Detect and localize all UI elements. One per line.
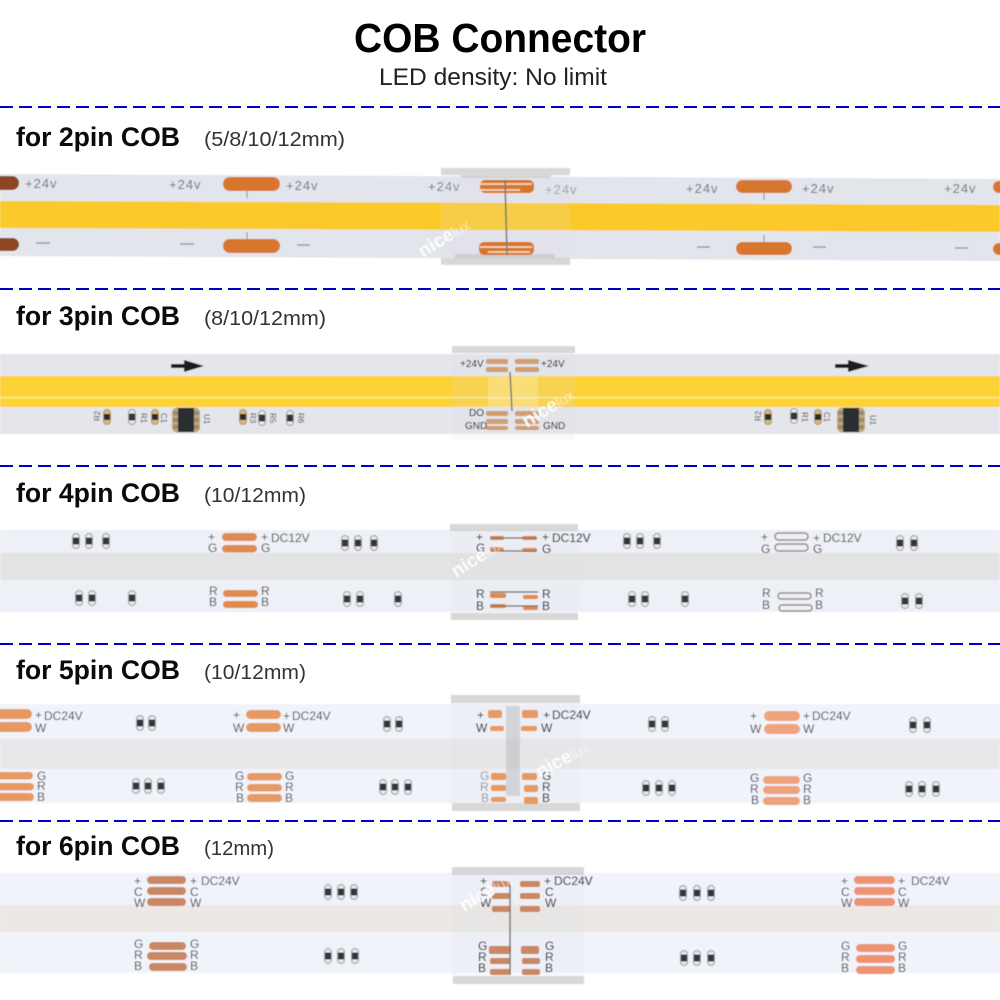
- strip: 4pin: G: [261, 541, 270, 555]
- strip: 2pin: +24v: [286, 178, 319, 193]
- size note: 3pin: (8/10/12mm): [204, 308, 326, 330]
- strip: 4pin: [0, 530, 1000, 612]
- strip: 2pin: +24v: [686, 181, 719, 196]
- connector: 4pin: nicelux: [448, 534, 508, 582]
- connector: 4pin: [448, 524, 591, 620]
- strip: 5pin: B: [751, 793, 759, 807]
- connector: 5pin: R: [480, 780, 489, 794]
- connector: 6pin: nicelux: [456, 869, 516, 916]
- size note: 6pin: (12mm): [204, 838, 274, 860]
- connector: 4pin: +: [476, 530, 483, 544]
- panel: 3pin COB: [0, 301, 1000, 440]
- strip: 3pin: C1: [159, 413, 168, 424]
- connector: 6pin: +: [544, 874, 551, 888]
- heading: 4pin: for 4pin COB: [16, 478, 180, 508]
- panel: 5pin COB: [0, 655, 1000, 811]
- strip: 5pin: +: [35, 708, 42, 722]
- connector: 3pin: +24V: [541, 359, 565, 370]
- strip: 5pin: W: [750, 722, 762, 736]
- connector: 6pin: B: [545, 961, 553, 975]
- strip: 4pin: G: [813, 542, 822, 556]
- connector: 4pin: R: [542, 587, 551, 601]
- strip: 5pin: DC24V: [44, 709, 83, 723]
- strip: 5pin: W: [233, 721, 245, 735]
- connector: 6pin: G: [478, 939, 487, 953]
- size note: 2pin: (5/8/10/12mm): [204, 129, 345, 151]
- strip: 5pin: G: [235, 769, 244, 783]
- connector: 3pin: +24V: [460, 359, 484, 370]
- strip: 5pin: DC24V: [812, 709, 851, 723]
- strip: 4pin: R: [762, 586, 771, 600]
- strip: 3pin: R3: [248, 413, 257, 424]
- panel: 2pin COB: [0, 122, 1000, 267]
- strip: 4pin: DC12V: [271, 531, 310, 545]
- strip: 6pin: C: [898, 885, 907, 899]
- connector: 5pin: G: [480, 769, 489, 783]
- strip: 5pin: +: [750, 709, 757, 723]
- connector: 3pin: nicelux: [519, 384, 579, 432]
- strip: 4pin: B: [209, 595, 217, 609]
- strip: 5pin: R: [285, 780, 294, 794]
- strip: 6pin: R: [898, 950, 907, 964]
- connector: 5pin: nicelux: [532, 737, 593, 782]
- strip: 6pin: W: [898, 896, 910, 910]
- strip: 4pin: R: [815, 586, 824, 600]
- strip: 6pin: +: [841, 874, 848, 888]
- connector: 5pin: W: [476, 721, 488, 735]
- strip: 5pin: B: [37, 790, 45, 804]
- strip: 4pin: R: [261, 584, 270, 598]
- size note: 5pin: (10/12mm): [204, 662, 306, 684]
- title: COB Connector: [354, 15, 646, 61]
- connector: 6pin: DC24V: [554, 874, 593, 888]
- strip: 4pin: R: [209, 584, 218, 598]
- strip: 4pin: +: [761, 530, 768, 544]
- strip: 6pin: G: [190, 937, 199, 951]
- connector: 5pin: +: [477, 708, 484, 722]
- panel: 6pin COB: [0, 831, 1000, 984]
- connector: 5pin: DC24V: [552, 708, 591, 722]
- strip: 3pin: R5: [268, 413, 277, 424]
- strip: 6pin: B: [134, 959, 142, 973]
- strip: 3pin: R1: [800, 412, 809, 423]
- strip: 3pin: R2: [754, 410, 763, 421]
- strip: 5pin: W: [35, 721, 47, 735]
- strip: 6pin: B: [841, 961, 849, 975]
- strip: 5pin: G: [37, 769, 46, 783]
- connector: 5pin: R: [542, 780, 551, 794]
- strip: 6pin: G: [898, 939, 907, 953]
- strip: 5pin: +: [233, 708, 240, 722]
- heading: 2pin: for 2pin COB: [16, 122, 180, 152]
- connector: 6pin: G: [545, 939, 554, 953]
- strip: 3pin: C1: [822, 412, 831, 423]
- connector: 5pin: B: [481, 791, 489, 805]
- strip: 5pin: [0, 704, 1000, 807]
- strip: 6pin: B: [190, 959, 198, 973]
- connector: 5pin: G: [542, 769, 551, 783]
- strip: 5pin: G: [750, 771, 759, 785]
- strip: 5pin: +: [283, 709, 290, 723]
- strip: 5pin: R: [750, 782, 759, 796]
- strip: 6pin: G: [841, 939, 850, 953]
- strip: 2pin: +24v: [944, 181, 977, 196]
- strip: 4pin: +: [261, 530, 268, 544]
- connector: 4pin: +: [542, 530, 549, 544]
- connector: 6pin: B: [478, 961, 486, 975]
- strip: 5pin: R: [37, 779, 46, 793]
- strip: 2pin: +24v: [25, 176, 58, 191]
- connector: 3pin: GND: [543, 421, 565, 432]
- strip: 3pin: U1: [202, 414, 211, 425]
- strip: 2pin: [0, 174, 1000, 267]
- strip: 5pin: W: [283, 721, 295, 735]
- strip: 6pin: +: [898, 874, 905, 888]
- connector: 4pin: DC12V: [552, 531, 591, 545]
- connector: 5pin: +: [543, 708, 550, 722]
- strip: 5pin: W: [803, 722, 815, 736]
- strip: 6pin: C: [190, 885, 199, 899]
- connector: 4pin: G: [542, 542, 551, 556]
- connector: 6pin: +: [480, 874, 487, 888]
- strip: 4pin: B: [261, 595, 269, 609]
- connector: 4pin: B: [476, 599, 484, 613]
- strip: 2pin: +24v: [169, 177, 202, 192]
- strip: 5pin: DC24V: [292, 709, 331, 723]
- strip: 4pin: B: [762, 598, 770, 612]
- strip: 4pin: G: [208, 541, 217, 555]
- strip: 6pin: W: [190, 896, 202, 910]
- connector: 3pin: [452, 346, 579, 440]
- strip: 6pin: DC24V: [911, 874, 950, 888]
- strip: 6pin: DC24V: [201, 874, 240, 888]
- strip: 6pin: W: [134, 896, 146, 910]
- strip: 4pin: DC12V: [823, 531, 862, 545]
- connector: 3pin: DO: [469, 408, 484, 419]
- connector: 2pin: [415, 168, 570, 265]
- connector: 6pin: W: [545, 896, 557, 910]
- strip: 6pin: +: [190, 874, 197, 888]
- heading: 5pin: for 5pin COB: [16, 655, 180, 685]
- panel: 4pin COB: [0, 478, 1000, 620]
- strip: 2pin: +24v: [802, 181, 835, 196]
- connector: 4pin: R: [476, 587, 485, 601]
- strip: 4pin: +: [208, 530, 215, 544]
- connector: 3pin: GND: [465, 421, 487, 432]
- strip: 6pin: R: [134, 948, 143, 962]
- strip: 6pin: B: [898, 961, 906, 975]
- strip: 5pin: G: [285, 769, 294, 783]
- heading: 3pin: for 3pin COB: [16, 301, 180, 331]
- strip: 5pin: R: [803, 782, 812, 796]
- connector: 6pin: C: [545, 885, 554, 899]
- connector: 4pin: G: [476, 541, 485, 555]
- strip: 5pin: R: [235, 780, 244, 794]
- connector: 6pin: R: [545, 950, 554, 964]
- strip: 3pin: U1: [868, 415, 877, 426]
- strip: 6pin: +: [134, 874, 141, 888]
- strip: 3pin: R1: [139, 413, 148, 424]
- connector: 6pin: C: [480, 885, 489, 899]
- strip: 3pin: R6: [296, 413, 305, 424]
- strip: 5pin: B: [285, 791, 293, 805]
- strip: 5pin: B: [803, 793, 811, 807]
- connector: 2pin: nicelux: [415, 214, 475, 262]
- arrow: direction left: [171, 360, 204, 372]
- strip: 6pin: C: [134, 885, 143, 899]
- strip: 5pin: +: [803, 709, 810, 723]
- arrow: direction right: [835, 360, 869, 372]
- connector: 5pin: W: [541, 721, 553, 735]
- strip: 5pin: B: [236, 791, 244, 805]
- connector: 6pin: R: [478, 950, 487, 964]
- strip: 4pin: +: [813, 531, 820, 545]
- size note: 4pin: (10/12mm): [204, 485, 306, 507]
- connector: 4pin: B: [542, 599, 550, 613]
- strip: 2pin: +24v: [428, 179, 461, 194]
- heading: 6pin: for 6pin COB: [16, 831, 180, 861]
- strip: 6pin: R: [190, 948, 199, 962]
- strip: 6pin: G: [134, 937, 143, 951]
- strip: 6pin: W: [841, 896, 853, 910]
- strip: 4pin: B: [815, 598, 823, 612]
- connector: 5pin: [451, 695, 593, 811]
- strip: 4pin: G: [761, 542, 770, 556]
- subtitle: LED density: No limit: [379, 64, 607, 91]
- strip: 5pin: G: [803, 771, 812, 785]
- connector: 5pin: B: [542, 791, 550, 805]
- strip: 2pin: +24v: [545, 182, 578, 197]
- strip: 3pin: R2: [93, 410, 102, 421]
- strip: 3pin: [0, 354, 1000, 434]
- connector: 6pin: [452, 867, 593, 984]
- strip: 6pin: [0, 873, 1000, 975]
- strip: 6pin: C: [841, 885, 850, 899]
- strip: 6pin: R: [841, 950, 850, 964]
- connector: 6pin: W: [480, 896, 492, 910]
